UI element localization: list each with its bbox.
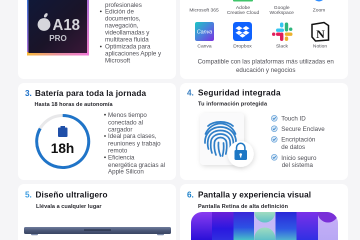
panel: design: [18, 184, 176, 240]
icon: Notion: Notion: [313, 44, 327, 50]
heading: display: 6.: [187, 190, 194, 200]
panel: chip A18 Pro: [18, 0, 176, 79]
subheading: battery: Hasta 18 horas de autonomía: [34, 102, 113, 108]
list: chip uses: aplicaciones Apple y: [105, 51, 162, 58]
heading: battery: Batería para toda la jornada: [35, 89, 146, 98]
app row: top: Google: [274, 5, 290, 11]
list: chip uses: profesionales: [105, 2, 142, 9]
subheading: design: Llévala a cualquier lugar: [36, 204, 102, 210]
panel: display: [180, 184, 348, 240]
icon: A18 Pro chip: A18: [52, 17, 80, 34]
icon: fingerprint: [200, 113, 244, 165]
list: battery benefits: [104, 112, 165, 175]
list: chip uses: [100, 2, 162, 65]
heading: design: 5.: [25, 190, 32, 200]
list: security features: Secure Enclave: [281, 126, 325, 133]
icon: Notion: [312, 22, 328, 50]
icon: Dropbox: Dropbox: [233, 44, 252, 50]
list: battery benefits: Eficiencia: [108, 154, 135, 161]
heading: display: Pantalla y experiencia visual: [198, 190, 311, 200]
heading: security: Seguridad integrada: [198, 88, 281, 98]
icon: Dropbox: [233, 22, 252, 50]
text: compatibility note: [198, 59, 334, 74]
subheading: security: Tu información protegida: [198, 101, 268, 107]
text: compatibility note: educación y negocios: [236, 67, 295, 74]
list: chip uses: navegación,: [105, 22, 139, 30]
heading: security: 4.: [187, 88, 194, 98]
list: security features: Inicio seguro: [281, 155, 317, 162]
list: chip uses: Microsoft: [105, 58, 130, 65]
icon: Slack: [272, 22, 292, 50]
list: security features: de datos: [281, 144, 305, 151]
icon: Canva: Canva: [197, 44, 212, 50]
list: chip uses: documentos,: [105, 16, 141, 22]
list: chip uses: Optimizada para: [105, 44, 151, 51]
list: security features: [271, 115, 325, 169]
list: battery benefits: Menos tiempo: [108, 112, 147, 119]
icon: Canva: [195, 22, 214, 50]
list: battery benefits: conectado al: [108, 119, 143, 126]
heading: battery: 3.: [25, 89, 32, 98]
list: battery benefits: Ideal para clases,: [108, 133, 157, 140]
icon: A18 Pro chip: [27, 0, 89, 56]
icon: Notion: N: [316, 27, 325, 41]
list: chip uses: videollamadas y: [105, 30, 150, 36]
panel: security: [180, 83, 348, 180]
icon: A18 Pro chip: PRO: [49, 34, 67, 43]
app row: top: [189, 0, 325, 16]
chart: 18h battery ring: 18h: [51, 140, 74, 156]
illustration: closed laptop: [24, 227, 171, 235]
app row: top: Zoom: [313, 8, 325, 14]
app row: top: Microsoft 365: [189, 8, 219, 14]
list: battery benefits: energética gracias al: [108, 162, 165, 169]
heading: design: Diseño ultraligero: [36, 190, 108, 200]
icon: battery: [58, 126, 68, 137]
list: chip uses: Edición de: [105, 8, 134, 16]
list: battery benefits: Apple Silicon: [108, 168, 144, 175]
list: security features: Encriptación: [281, 136, 316, 143]
icon: padlock: [228, 141, 254, 167]
list: battery benefits: reuniones y trabajo: [108, 140, 161, 147]
chart: 18h battery ring: [37, 115, 89, 168]
app row: top: Creative Cloud: [227, 10, 259, 16]
panel: battery: [18, 83, 176, 180]
icon: Slack: Slack: [276, 44, 289, 50]
list: security features: Touch ID: [281, 115, 306, 122]
app row: top: Workspace: [270, 10, 294, 16]
list: battery benefits: remoto: [108, 147, 128, 154]
icon: Canva: Canva: [197, 30, 212, 36]
list: chip uses: multitarea fluida: [105, 36, 149, 44]
text: compatibility note: Compatible con las plataformas más utilizadas en: [198, 59, 334, 66]
list: battery benefits: cargador: [108, 126, 132, 133]
illustration: Retina wallpaper: [191, 212, 338, 240]
panel: compatible apps: [180, 0, 348, 79]
list: security features: del sistema: [282, 162, 314, 169]
subheading: display: Pantalla Retina de alta definición: [198, 204, 289, 210]
app row: top: Adobe: [236, 5, 250, 11]
